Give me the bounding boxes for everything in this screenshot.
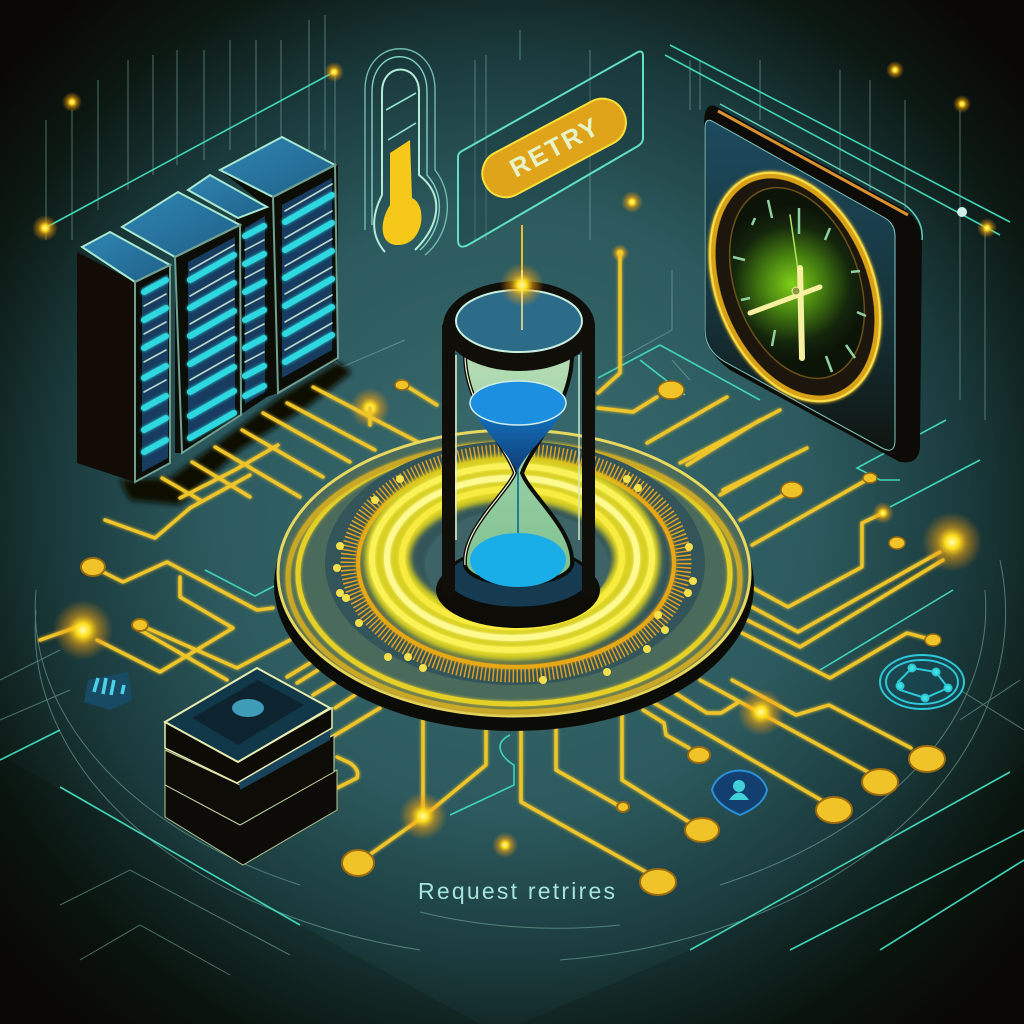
left post [442,323,455,597]
stack chip panel [192,680,304,745]
left traces [40,562,380,788]
upper left traces [105,382,437,538]
small glowing nodes in background [32,61,997,858]
server rack 3 [188,175,267,413]
clock face [705,169,889,397]
top sand [471,403,566,473]
rack shadow [120,362,352,505]
glowing concentric rings [372,466,652,650]
stack middle layer [165,735,334,825]
disc shadow [274,439,754,731]
server rack 4 [220,137,338,400]
icon: thermometer [365,49,447,255]
ring centre [425,510,609,620]
right and upper nodes [395,380,941,646]
outer yellow rim [298,444,730,704]
top sparkle [500,263,544,307]
hourglass top cap [443,281,595,371]
connector from retry to hourglass [521,225,523,285]
retry pill button [474,91,634,205]
bottom sand [470,533,566,587]
small bars icon [84,672,132,710]
orange tick fringe [348,451,684,675]
stack bottom layer [165,770,337,865]
hourglass glass [465,355,572,584]
panel: central glowing disc [274,430,754,731]
panel: server racks [77,137,352,505]
clock front plate [705,120,895,450]
caption: request retries: Request retrires [418,878,615,904]
retry sign panel [458,52,643,247]
clock rim [678,147,912,427]
circuit end nodes [53,380,982,895]
glowing band under rings [387,478,637,638]
server rack 2 [122,192,241,453]
falling sand stream [517,470,519,560]
network icon [880,655,964,709]
clock hands [750,215,820,358]
hourglass base [436,552,600,628]
clock back plate [704,105,922,462]
server rack 1 [77,232,170,482]
clock tick marks [733,200,866,372]
large glow nodes [53,502,982,840]
stack top layer [165,708,332,783]
user pin icon [712,771,767,815]
bottom traces [358,680,911,872]
circuit traces [40,253,943,872]
icon: hourglass [436,263,600,628]
left and bottom nodes [81,558,945,895]
disc dots [333,475,697,684]
retry label: RETRY [504,112,603,183]
disc base [278,430,750,716]
right post [582,323,595,597]
panel: wall clock [678,104,922,462]
floor edge shading [0,755,1024,1024]
inner dark ring field [325,441,705,685]
right traces [598,253,943,678]
server stack [165,668,337,865]
